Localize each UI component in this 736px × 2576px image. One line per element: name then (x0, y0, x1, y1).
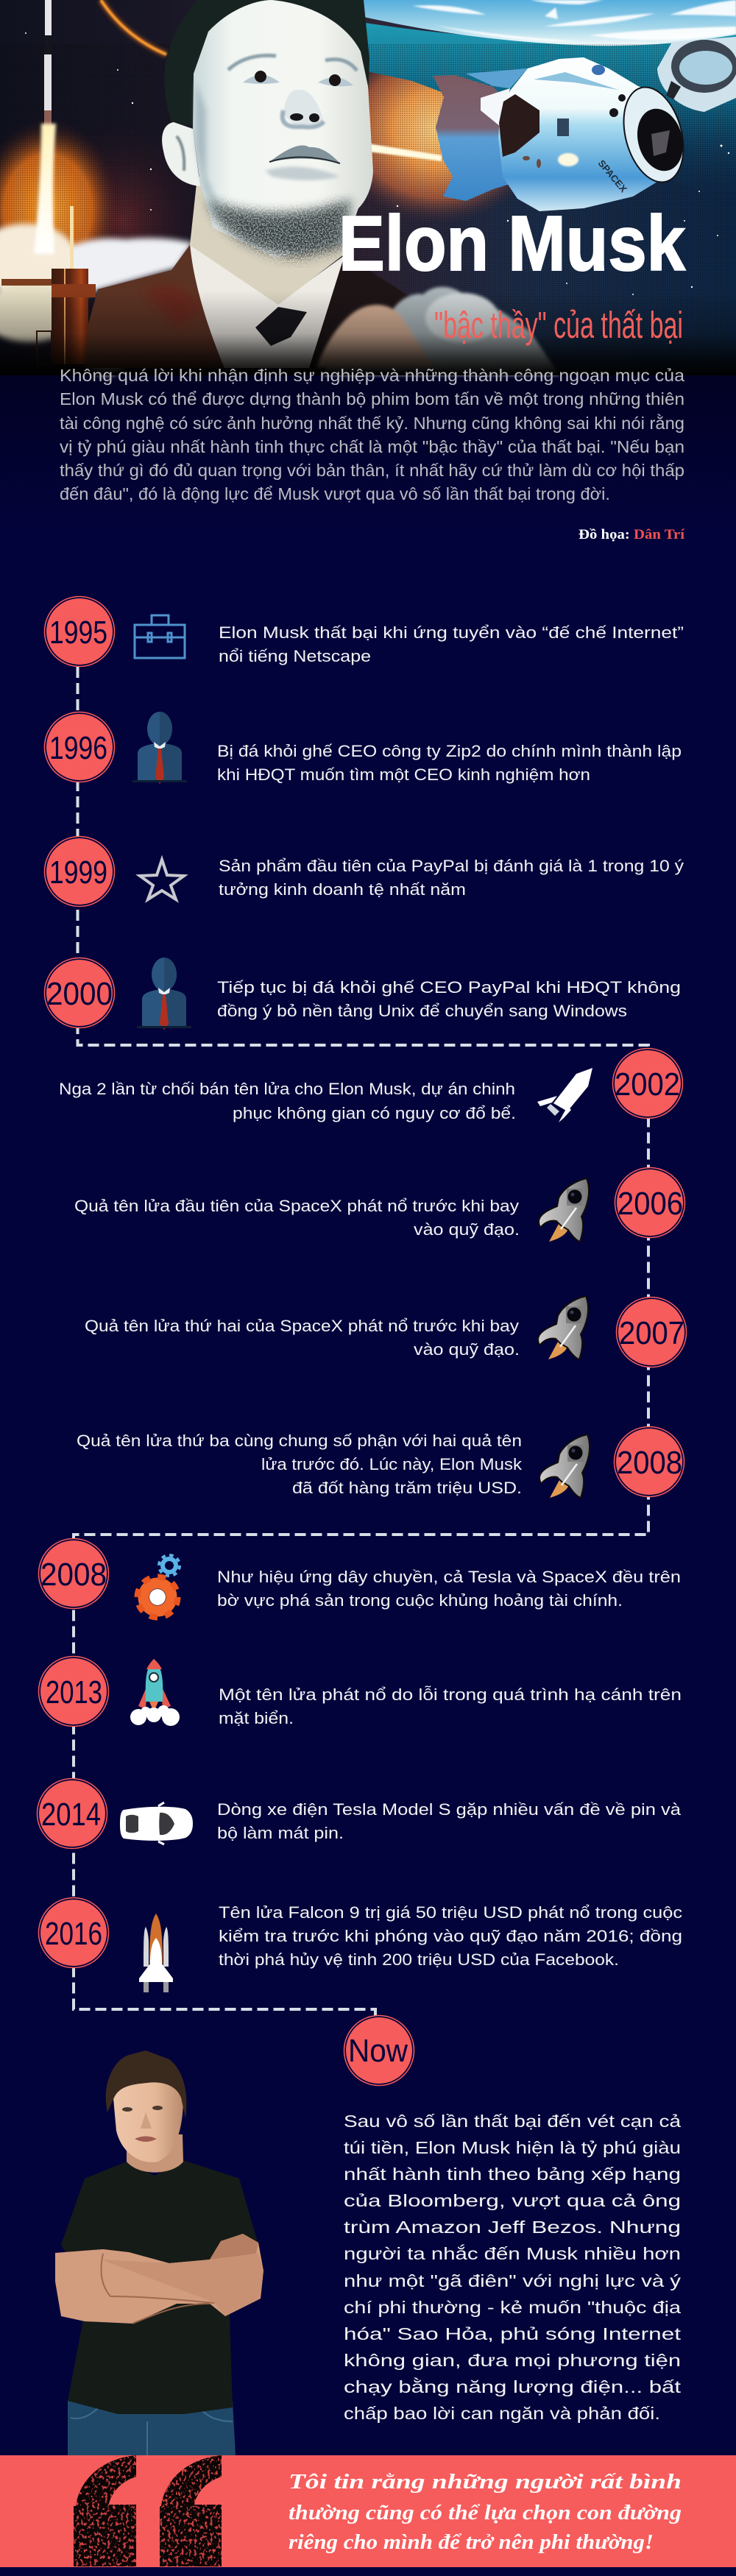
milestone 2016 (38, 1897, 682, 1992)
arms (55, 2234, 263, 2324)
icon: briefcase (135, 615, 185, 658)
text: now paragraph: trùm Amazon Jeff Bezos. Nhưng (344, 2218, 681, 2237)
text: 2013: Một tên lửa phát nổ do lỗi trong quá trình hạ cánh trên (219, 1685, 682, 1704)
hero image: rocket launch, Musk portrait and Dragon capsule (0, 0, 736, 530)
milestone 2000: 2000 (46, 976, 113, 1012)
milestone 2006: 2006 (618, 1186, 683, 1222)
credit: Đồ họa: Dân Trí (578, 527, 685, 542)
milestone 2008 left: 2008 (40, 1557, 107, 1593)
suit (85, 243, 224, 368)
text: 2000: Tiếp tục bị đá khỏi ghế CEO PayPal khi HĐQT không (217, 978, 681, 997)
panel: quote band (0, 2455, 736, 2567)
milestone 2008 right: 2008 (617, 1445, 682, 1481)
orange orbit arc (101, 0, 166, 54)
text: 2013 (219, 1685, 682, 1727)
milestone 1996 (44, 712, 682, 784)
Dragon capsule: SPACEX (596, 158, 629, 194)
milestone 1999 (44, 836, 684, 907)
text: 1995 (219, 623, 684, 665)
intro paragraph (60, 366, 684, 503)
stars (25, 32, 729, 295)
icon: white rocket (537, 1068, 592, 1122)
text: 1995: nổi tiếng Netscape (219, 647, 371, 665)
text: now paragraph: như một "gã điên" với nghị lực và ý (344, 2271, 682, 2290)
quote text: Tôi tin rằng những người rất bình (289, 2470, 682, 2494)
text: now paragraph: chấp bao lời can ngăn và phản đối. (344, 2404, 660, 2423)
text: 2008 right: lửa trước đó. Lúc này, Elon Musk (261, 1455, 523, 1473)
neck (127, 2134, 183, 2173)
text: 2007: vào quỹ đạo. (414, 1340, 520, 1359)
text: 1995: Elon Musk thất bại khi ứng tuyển vào “đế chế Internet” (219, 623, 684, 642)
milestone 2014: 2014 (41, 1797, 101, 1833)
text: 2008 left: Như hiệu ứng dây chuyền, cả Tesla và SpaceX đều trên (217, 1568, 681, 1586)
facial shadows (196, 81, 221, 210)
text: 1999: Sản phẩm đầu tiên của PayPal bị đánh giá là 1 trong 10 ý (219, 857, 684, 875)
photo: Elon Musk arms crossed (55, 2050, 263, 2455)
milestone 2008 left (38, 1538, 681, 1618)
head (162, 0, 373, 305)
text: 2016 (219, 1903, 682, 1969)
milestone 2014 (37, 1778, 682, 1849)
Dragon capsule (433, 57, 693, 211)
icon: silver rocket (538, 1296, 588, 1359)
text: 1996: Bị đá khỏi ghế CEO công ty Zip2 do chính mình thành lập (217, 742, 682, 760)
timeline connector: dashed path (74, 667, 648, 2017)
milestone 2002 (59, 1048, 683, 1122)
icon: executive (137, 958, 191, 1030)
text: now paragraph: túi tiền, Elon Musk hiện là tỷ phú giàu (344, 2138, 681, 2157)
icon: star (140, 860, 184, 899)
text: 2008 right: đã đốt hàng trăm triệu USD. (292, 1479, 522, 1497)
milestone 2006 (74, 1167, 684, 1242)
text: 2008 right (77, 1432, 523, 1497)
text: 2006 (74, 1197, 520, 1239)
text: 2014: Dòng xe điện Tesla Model S gặp nhiều vấn đề về pin và (217, 1800, 682, 1819)
text: 2002: Nga 2 lần từ chối bán tên lửa cho Elon Musk, dự án chinh (59, 1080, 515, 1098)
text: 2007: Quả tên lửa thứ hai của SpaceX phát nổ trước khi bay (85, 1317, 520, 1335)
jeans (68, 2401, 236, 2455)
t-shirt (61, 2160, 258, 2414)
text: 2014: bộ làm mát pin. (217, 1824, 344, 1842)
text: now paragraph (344, 2112, 682, 2423)
shirt (190, 243, 344, 368)
intro paragraph: đến đâu", đó là động lực để Musk vượt qua vô số lần thất bại trong đời. (60, 484, 610, 503)
icon: car top view (120, 1802, 193, 1844)
text: 2002 (59, 1080, 516, 1122)
title: Elon Musk (339, 200, 686, 287)
text: 1999 (219, 857, 684, 899)
milestone 2013 (38, 1656, 682, 1727)
text: now paragraph: Sau vô số lần thất bại đến vét cạn cả (344, 2112, 681, 2131)
launch tower (1, 269, 96, 364)
icon: silver rocket (539, 1434, 590, 1498)
intro paragraph: thấy thứ gì đó đủ quan trọng với bản thân, ít nhất hãy cứ thử làm dù cơ hội thấp (60, 461, 684, 480)
intro paragraph: vị tỷ phú giàu nhất hành tinh thực chất là một "bậc thầy" của thất bại. "Nếu bạn (60, 437, 684, 456)
text: 2016: thời phá hủy vệ tinh 200 triệu USD của Facebook. (219, 1950, 619, 1969)
milestone 2008 right (77, 1426, 684, 1498)
icon: silver rocket (539, 1178, 589, 1242)
clouds center (316, 287, 559, 375)
milestone 1995 (44, 596, 684, 667)
text: 1999: tưởng kinh doanh tệ nhất năm (219, 880, 466, 899)
text: 2000: đồng ý bỏ nền tảng Unix để chuyển sang Windows (217, 1002, 627, 1020)
light beam (368, 144, 442, 161)
icon: space shuttle (139, 1914, 173, 1992)
milestone Now: Now (348, 2033, 408, 2069)
milestone 2000 (44, 958, 681, 1030)
intro paragraph: Elon Musk có thể được dựng thành bộ phim bom tấn về một trong những thiên (60, 389, 684, 408)
icon: gears (137, 1555, 180, 1618)
quote text (289, 2470, 682, 2554)
milestone 2016: 2016 (45, 1916, 102, 1952)
text: now paragraph: người ta nhắc đến Musk nhiều hơn (344, 2244, 681, 2263)
text: 2008 left: bờ vực phá sản trong cuộc khủng hoảng tài chính. (217, 1591, 623, 1610)
milestone 2013: 2013 (46, 1674, 102, 1710)
icon: quotation marks (74, 2455, 222, 2566)
icon: executive (132, 712, 187, 784)
text: 2008 left (217, 1568, 681, 1610)
text: 2013: mặt biển. (219, 1709, 294, 1727)
text: 1996: khi HĐQT muốn tìm một CEO kinh nghiệm hơn (217, 765, 590, 784)
text: 2014 (217, 1800, 682, 1842)
milestone 1999: 1999 (49, 854, 107, 891)
text: 2006: vào quỹ đạo. (414, 1220, 520, 1239)
text: now paragraph: hóa" Sao Hỏa, phủ sóng Internet (344, 2324, 682, 2343)
launch rocket and flame (34, 0, 74, 272)
icon: teal rocket (130, 1659, 180, 1726)
text: now paragraph: chí phi thường - kẻ muốn "thuộc địa (344, 2298, 681, 2317)
text: now paragraph: của Bloomberg, vượt qua cả ông (344, 2191, 681, 2210)
text: 2002: phục không gian có nguy cơ đổ bể. (233, 1104, 516, 1122)
head (113, 2076, 183, 2162)
milestone 1996: 1996 (49, 730, 107, 766)
text: 2007 (85, 1317, 520, 1359)
milestone 2007 (85, 1296, 686, 1367)
text: 2000 (217, 978, 681, 1020)
text: now paragraph: không gian, đưa mọi phương tiện (344, 2351, 681, 2370)
milestone Now (344, 2015, 414, 2086)
text: 2008 right: Quả tên lửa thứ ba cùng chung số phận với hai quả tên (77, 1432, 522, 1450)
intro paragraph: tài công nghệ có sức ảnh hưởng nhất thế kỷ. Nhưng cũng không sai khi nói rằng (60, 414, 684, 433)
milestone 1995: 1995 (49, 615, 107, 651)
text: 2016: Tên lửa Falcon 9 trị giá 50 triệu USD phát nổ trong cuộc (219, 1903, 682, 1922)
quote text: riêng cho mình để trở nên phi thường! (289, 2530, 654, 2554)
intro paragraph: Không quá lời khi nhận định sự nghiệp và những thành công ngoạn mục của (60, 366, 684, 385)
capsule hatch (657, 37, 736, 112)
text: now paragraph: chạy bằng năng lượng điện... bất (344, 2377, 682, 2396)
quote text: thường cũng có thể lựa chọn con đường (289, 2501, 682, 2524)
text: 2016: kiểm tra trước khi phóng vào quỹ đạo năm 2016; đồng (219, 1927, 682, 1945)
text: 1996 (217, 742, 682, 784)
milestone 2002: 2002 (615, 1066, 680, 1103)
text: now paragraph: nhất hành tinh theo bảng xếp hạng (344, 2165, 681, 2184)
milestone 2007: 2007 (619, 1315, 684, 1351)
text: 2006: Quả tên lửa đầu tiên của SpaceX phát nổ trước khi bay (74, 1197, 520, 1215)
launch clouds left (0, 224, 193, 375)
